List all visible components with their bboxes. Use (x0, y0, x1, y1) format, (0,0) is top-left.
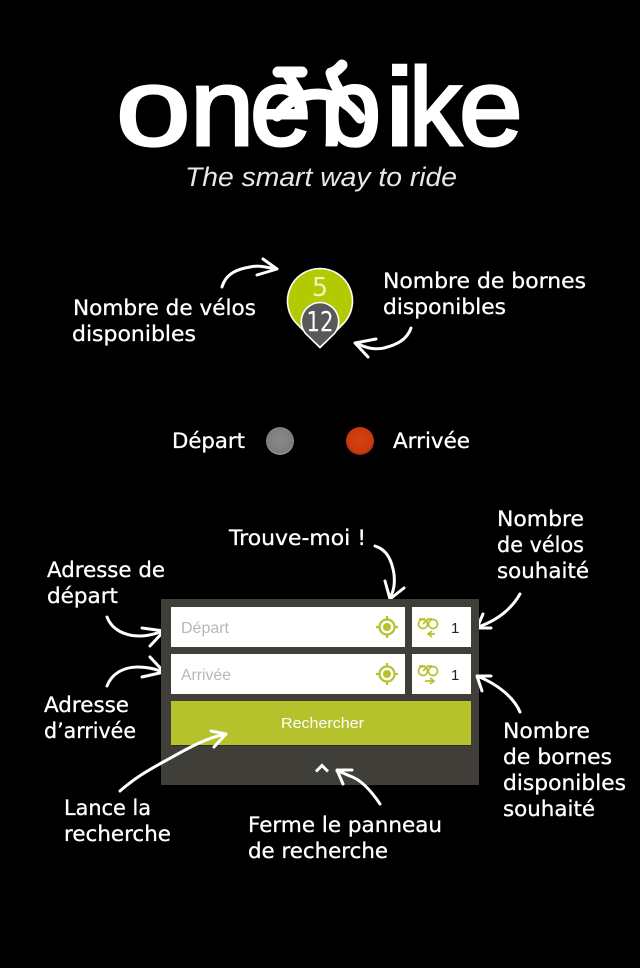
button: rechercher: Rechercher (281, 715, 364, 732)
logo: onebike: n (190, 46, 254, 168)
field: arrivée (171, 654, 405, 694)
counter: bornes: 1 (451, 667, 459, 684)
logo: onebike: i (385, 45, 414, 169)
button: rechercher (171, 701, 471, 746)
label: ferme le panneau de recherche (248, 813, 442, 863)
arrow: trouve-moi (375, 546, 404, 599)
logo: onebike: e (459, 45, 523, 169)
label: nombre de vélos souhaité: Nombre (497, 507, 584, 531)
field: départ (171, 607, 405, 647)
label: nombre de vélos disponibles: Nombre de vélos (73, 296, 256, 320)
logo: onebike: b (320, 46, 381, 169)
label: nombre de bornes disponibles: disponibles (383, 295, 506, 319)
label: nombre de bornes disponibles souhaité: Nombre (503, 719, 590, 743)
panel: search (161, 599, 479, 785)
label: ferme le panneau de recherche: Ferme le panneau (248, 813, 442, 837)
arrow: adresse de départ (107, 617, 164, 646)
field: départ: Départ (181, 620, 230, 637)
label: nombre de vélos souhaité: souhaité (497, 559, 589, 583)
label: lance la recherche (64, 796, 171, 846)
label: adresse de départ: Adresse de (47, 558, 165, 582)
label: ferme le panneau de recherche: de recherche (248, 839, 388, 863)
label: nombre de bornes disponibles: Nombre de bornes (383, 269, 586, 293)
arrow: adresse d'arrivée (107, 657, 164, 686)
icon: bicycle frame (277, 65, 360, 118)
label: nombre de vélos souhaité (497, 507, 589, 583)
arrow: ferme le panneau (337, 770, 380, 804)
label: nombre de bornes disponibles souhaité: disponibles (503, 771, 626, 795)
arrow: to marker from left (222, 259, 277, 287)
label: adresse d'arrivée (44, 693, 136, 743)
label: adresse de départ: départ (47, 584, 118, 608)
icon: chevron up (316, 766, 328, 772)
legend: arrivée (346, 427, 470, 455)
marker: 5 vélos, 12 bornes: 5 (312, 273, 328, 303)
label: adresse de départ (47, 558, 165, 608)
label: nombre de bornes disponibles souhaité (503, 719, 626, 821)
logo: onebike: e (250, 46, 311, 169)
legend: départ: Départ (172, 429, 245, 453)
label: lance la recherche: Lance la (64, 796, 151, 820)
label: lance la recherche: recherche (64, 822, 171, 846)
label: adresse d'arrivée: Adresse (44, 693, 129, 717)
arrow: lance la recherche (120, 731, 226, 791)
arrow: vélos souhaité (477, 594, 520, 628)
field: arrivée: Arrivée (181, 667, 231, 684)
counter: vélos (412, 607, 471, 647)
label: nombre de bornes disponibles souhaité: souhaité (503, 797, 595, 821)
logo: onebike: o (116, 45, 191, 168)
label: nombre de vélos disponibles (72, 296, 256, 346)
label: nombre de bornes disponibles souhaité: de bornes (503, 745, 612, 769)
arrow: to marker from right (355, 328, 411, 357)
legend: arrivée: Arrivée (393, 429, 470, 453)
arrow: bornes souhaité (477, 676, 520, 712)
label: nombre de bornes disponibles (383, 269, 586, 319)
label: adresse d'arrivée: d’arrivée (44, 719, 136, 743)
counter: vélos: 1 (451, 620, 459, 637)
logo: onebike (116, 45, 523, 169)
marker: 5 vélos, 12 bornes: 12 (306, 305, 334, 338)
label: nombre de vélos souhaité: de vélos (497, 533, 584, 557)
marker: 5 vélos, 12 bornes (287, 268, 353, 348)
counter: bornes (412, 654, 471, 694)
label: nombre de vélos disponibles: disponibles (72, 322, 196, 346)
label: trouve-moi: Trouve-moi ! (228, 526, 366, 550)
tagline: The smart way to ride (185, 162, 457, 192)
logo: onebike: k (409, 46, 462, 169)
legend: départ (172, 427, 294, 455)
